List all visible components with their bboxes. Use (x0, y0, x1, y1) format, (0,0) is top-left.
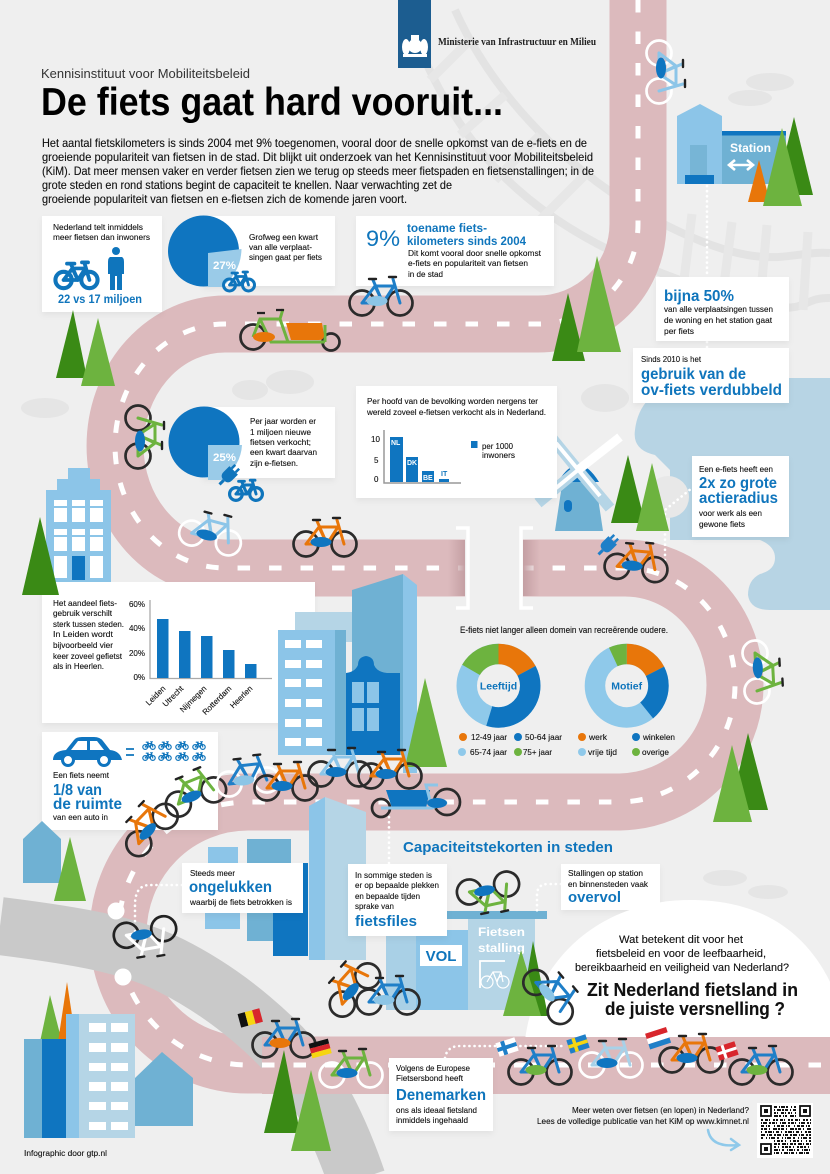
heading: double range: 2x zo grote (699, 475, 777, 492)
lower city blocks (205, 797, 366, 960)
clouds (21, 73, 794, 899)
text: question (575, 934, 789, 974)
bar chart: cities: Utrecht (161, 684, 186, 709)
text: roughly a quarter: Grofweg een kwart (249, 232, 319, 242)
text: more bikes than inhabitants (53, 222, 150, 242)
text: explanation: e-fiets en populariteit van fietsen (408, 258, 528, 268)
text: for commuting (699, 508, 762, 529)
pie chart 27%: 27% (213, 260, 236, 272)
bottom road dashes (525, 1062, 830, 1068)
text: trips to station: per fiets (664, 326, 694, 336)
intro paragraph: groeiende populariteit van fietsen in de stad. Dit blijkt uit onderzoek van het Kennisinstituut voor Mobiliteitsbeleid (42, 150, 593, 164)
cargo bike: blue (372, 785, 460, 817)
text: nowhere so many e-bikes: Per hoofd van de bevolking worden nergens ter (367, 396, 538, 406)
city buildings (278, 574, 417, 773)
text: a bike takes: Een fiets neemt (53, 770, 110, 780)
heading: one eighth of the space: de ruimte (53, 796, 122, 813)
text: trips to station: van alle verplaatsingen tussen (664, 304, 773, 314)
bar chart: cities: 40% (129, 624, 145, 633)
bike parking building: stalling (478, 941, 525, 955)
text: parking at stations (568, 868, 649, 889)
bar chart: e-bikes per 1000: DK (407, 460, 417, 467)
panel: new bikes sold (168, 406, 335, 500)
text: share differs per city: als in Heerlen. (53, 661, 104, 671)
winding cycle road (115, 0, 830, 1065)
text: roughly a quarter: van alle verplaat- (249, 242, 312, 252)
panel: e-bike sales per capita (356, 386, 557, 498)
bar chart: cities: 60% (129, 600, 145, 609)
station: Station (730, 141, 771, 155)
road crossing markers (108, 902, 132, 986)
bottom-left city (24, 982, 193, 1138)
tree near city (405, 678, 447, 767)
legend: age: 65-74 jaar (470, 747, 507, 757)
text: more bikes than inhabitants: meer fietsen dan inwoners (53, 232, 150, 242)
text: question: fietsbeleid en voor de leefbaarheid, (596, 948, 766, 960)
bar chart: cities: Rotterdam (201, 684, 234, 717)
icon: plug (215, 463, 241, 489)
heading: bike jams: fietsfiles (355, 913, 417, 930)
text: roughly a quarter (249, 232, 322, 262)
icon: car (53, 737, 122, 766)
text: read more: Lees de volledige publicatie van het KiM op www.kimnet.nl (537, 1116, 749, 1126)
equals sign (126, 749, 134, 755)
lake (635, 378, 830, 610)
text: overtaken: ons als ideaal fietsland (396, 1105, 477, 1115)
text: share differs per city: Het aandeel fiets- (53, 598, 117, 608)
text: one million new bikes: 1 miljoen nieuwe (250, 427, 311, 437)
subtitle: Kennisinstituut voor Mobiliteitsbeleid (41, 66, 250, 81)
panel: e-bike demographics (458, 625, 675, 757)
panel: nearly 50% (656, 277, 789, 341)
flag: Germany (309, 1039, 332, 1058)
text: parking at stations: Stallingen op station (568, 868, 643, 878)
pie chart 27% (168, 216, 242, 287)
dotted line: station to boxes (706, 186, 708, 348)
heading: not just older recreational riders: E-fiets niet langer alleen domein van recreërende oudere. (460, 625, 668, 635)
dotted line: denmark (445, 1046, 566, 1058)
station (677, 104, 786, 184)
heading: increase in bicycle kilometres: kilometers sinds 2004 (407, 234, 526, 248)
legend: age: 50-64 jaar (525, 732, 562, 742)
icon: e-bike (230, 480, 262, 500)
text: overtaken: inmiddels ingehaald (396, 1115, 468, 1125)
bar chart: e-bikes per 1000: IT (441, 471, 448, 478)
text: according to the federation (396, 1063, 470, 1083)
dotted line: overcrowded parking (537, 884, 561, 914)
flag: Netherlands (645, 1027, 671, 1049)
text: one million new bikes: zijn e-fietsen. (250, 458, 298, 468)
figure: 9%: 9% (366, 226, 400, 251)
heading: ov-fiets use doubled (641, 366, 782, 399)
legend: motive: vrije tijd (588, 747, 617, 757)
text: explanation: in de stad (408, 269, 443, 279)
bar chart: e-bikes per 1000: 10 (371, 435, 380, 444)
credit: Infographic door gtp.nl (24, 1148, 107, 1158)
text: according to the federation: Volgens de Europese (396, 1063, 470, 1073)
bar chart: cities: Nijmegen (178, 684, 208, 714)
figure: bijna 50%: bijna 50% (664, 288, 734, 305)
text: of a car: van een auto in (53, 812, 108, 822)
flag: Belgium (238, 1008, 263, 1028)
logo: ministry (398, 0, 431, 68)
pie chart 25%: 25% (213, 452, 236, 464)
heading: overvol: overvol (568, 890, 621, 906)
text: for commuting: voor werk als een (699, 508, 762, 518)
legend: age: 12-49 jaar (471, 732, 507, 742)
figure: 22 vs 17 million: 22 vs 17 miljoen (58, 292, 142, 306)
text: in some cities (355, 870, 439, 911)
text: one million new bikes: fietsen verkocht; (250, 437, 311, 447)
panel: ov-fiets doubled (633, 348, 789, 403)
panel: traffic jams (348, 864, 447, 936)
icon: plug on e-bike (594, 533, 620, 559)
text: nowhere so many e-bikes (366, 396, 546, 417)
heading: increase in bicycle kilometres (407, 221, 526, 248)
flag: Sweden (566, 1034, 590, 1054)
label: Leeftijd: Leeftijd (480, 680, 517, 692)
intro paragraph: (KiM). Dat meer mensen vaker en verder fietsen zien we terug op steeds meer fietspaden en fietsenstallingen; in de (42, 164, 594, 178)
panel: more accidents (182, 863, 303, 913)
tree next to house (54, 837, 86, 901)
heading: double range: actieradius (699, 490, 778, 507)
text: explanation: Dit komt vooral door snelle opkomst (408, 248, 542, 258)
text: trips to station (664, 304, 773, 336)
text: share differs per city: In Leiden wordt (53, 629, 114, 639)
text: share differs per city: bijvoorbeeld vier (53, 640, 113, 650)
dotted lines: accidents and capacity (135, 812, 389, 935)
heading: capacity shortages: Capaciteitstekorten in steden (403, 839, 613, 856)
panel: e-bike range (692, 456, 789, 537)
heading: right gear: Zit Nederland fietsland in (587, 980, 798, 1000)
grey main road (0, 926, 357, 1174)
text: share differs per city: gebruik verschilt (53, 608, 113, 618)
intro paragraph: groeiende populariteit van fietsen en e-fietsen zich de komende jaren voort. (42, 192, 407, 206)
text: an e-bike has: Een e-fiets heeft een (699, 464, 773, 474)
legend: per 1000 inhabitants (471, 441, 515, 460)
text: one million new bikes (250, 416, 317, 468)
text: since 2010: Sinds 2010 is het (641, 354, 702, 364)
bar chart: cities (129, 600, 272, 717)
bar chart: e-bikes per 1000: 0 (374, 475, 379, 484)
text: in some cities: In sommige steden is (355, 870, 432, 880)
pie chart 25% (168, 406, 242, 480)
legend: per 1000 inhabitants: per 1000 (482, 441, 513, 451)
heading: right gear: de juiste versnelling ? (605, 999, 785, 1019)
legend: age: 75+ jaar (523, 747, 552, 757)
text: ministry name: Ministerie van Infrastructuur en Milieu (438, 37, 596, 48)
legend: motive: werk (588, 732, 608, 742)
bar chart: cities: Leiden (144, 684, 167, 707)
heading: double range (699, 475, 778, 507)
trees at station (748, 117, 813, 206)
bottom stretch of road (262, 1037, 830, 1094)
text: share differs per city: keer zoveel gefietst (53, 651, 123, 661)
bike parking building: Fietsen (478, 925, 525, 939)
trees (22, 256, 768, 1151)
panel: share of trips by bike (168, 216, 335, 291)
heading: Denemarken: Denemarken (396, 1087, 486, 1104)
text: trips to station: de woning en het station gaat (664, 315, 773, 325)
text: parking at stations: en binnensteden vaak (568, 879, 649, 889)
heading: ov-fiets use doubled: gebruik van de (641, 366, 746, 383)
donut chart: age (467, 654, 530, 717)
heading: increase in bicycle kilometres: toename fiets- (407, 221, 487, 235)
text: one million new bikes: een kwart daarvan (250, 447, 317, 457)
legend: motive: winkelen (642, 732, 675, 742)
text: read more: Meer weten over fietsen (en lopen) in Nederland? (572, 1105, 749, 1115)
text: explanation (408, 248, 542, 279)
bar chart: e-bikes per 1000: 5 (374, 456, 379, 465)
bar chart: e-bikes per 1000: NL (391, 440, 401, 447)
title: De fiets gaat hard vooruit... (41, 81, 503, 124)
heading: one eighth of the space: 1/8 van (53, 782, 102, 799)
text: in some cities: er op bepaalde plekken (355, 880, 439, 890)
panel: bicycle counts (42, 216, 162, 312)
bar chart: e-bikes per 1000: BE (423, 475, 433, 482)
text: overtaken (396, 1105, 477, 1125)
legend: motive (578, 732, 675, 757)
intro paragraph (42, 136, 594, 206)
bar chart: e-bikes per 1000 (371, 430, 461, 484)
road along bottom over dome (525, 1037, 830, 1094)
small house (23, 821, 61, 883)
panel: car versus bikes (42, 732, 218, 830)
bar chart: cities: Heerlen (228, 684, 254, 710)
left gabled building (46, 468, 111, 587)
panel: Denmark (389, 1058, 493, 1131)
QR code (757, 1103, 813, 1158)
heading: one eighth of the space (53, 782, 122, 813)
heading: right gear (587, 980, 798, 1019)
text: share differs per city (53, 598, 124, 671)
text: involving bikes: waarbij de fiets betrokken is (189, 897, 292, 907)
donut chart: motive (595, 654, 658, 717)
heading: ov-fiets use doubled: ov-fiets verdubbeld (641, 382, 782, 399)
panel: concluding question dome (525, 900, 830, 1040)
bike parking building (386, 911, 547, 1010)
text: according to the federation: Fietsersbond heeft (396, 1073, 464, 1083)
cargo bike: green (240, 309, 340, 350)
icon: bicycle (55, 262, 98, 288)
label: Motief: Motief (611, 680, 643, 692)
heading: accidents: ongelukken (189, 879, 272, 896)
text: roughly a quarter: singen gaat per fiets (249, 252, 322, 262)
legend: motive: overige (642, 747, 669, 757)
arrow to QR code (708, 1130, 739, 1150)
railway backdrop (425, 10, 830, 310)
dotted line: e-bike range (665, 488, 692, 560)
text: in some cities: en bepaalde tijden (355, 891, 420, 901)
text: more: Steeds meer (190, 868, 235, 878)
intro paragraph: grote steden en rond stations begint de capaciteit te knellen. Naar verwachting zet de (42, 178, 452, 192)
flag: Finland (495, 1037, 519, 1057)
icon: eight bikes (143, 742, 205, 760)
bar chart: cities: 20% (129, 649, 145, 658)
panel: bike share by city (42, 582, 315, 723)
icon: person (108, 247, 124, 290)
legend: age (458, 732, 562, 757)
bridge gap (448, 528, 540, 608)
text: one million new bikes: Per jaar worden er (250, 416, 316, 426)
panel: 9% increase (356, 216, 554, 286)
text: nowhere so many e-bikes: wereld zoveel e-fietsen verkocht als in Nederland. (366, 407, 546, 417)
text: question: bereikbaarheid en veiligheid van Nederland? (575, 962, 789, 974)
text: question: Wat betekent dit voor het (619, 934, 743, 946)
bicycles on the road (111, 40, 793, 1088)
intro paragraph: Het aantal fietskilometers is sinds 2004 met 9% toegenomen, vooral door de snelle opkomst van de e-fiets en de (42, 136, 587, 150)
panel: overcrowded (561, 864, 660, 910)
flag: Denmark (715, 1041, 739, 1061)
text: more bikes than inhabitants: Nederland telt inmiddels (53, 222, 143, 232)
text: for commuting: gewone fiets (699, 519, 745, 529)
bar chart: cities: 0% (133, 673, 145, 682)
legend: per 1000 inhabitants: inwoners (482, 450, 515, 460)
text: in some cities: sprake van (355, 901, 394, 911)
bike parking building: VOL (426, 948, 456, 965)
text: read more (537, 1105, 749, 1126)
text: share differs per city: sterk tussen steden. (53, 619, 124, 629)
windmill (538, 432, 620, 531)
icon: small bicycle (224, 272, 254, 291)
